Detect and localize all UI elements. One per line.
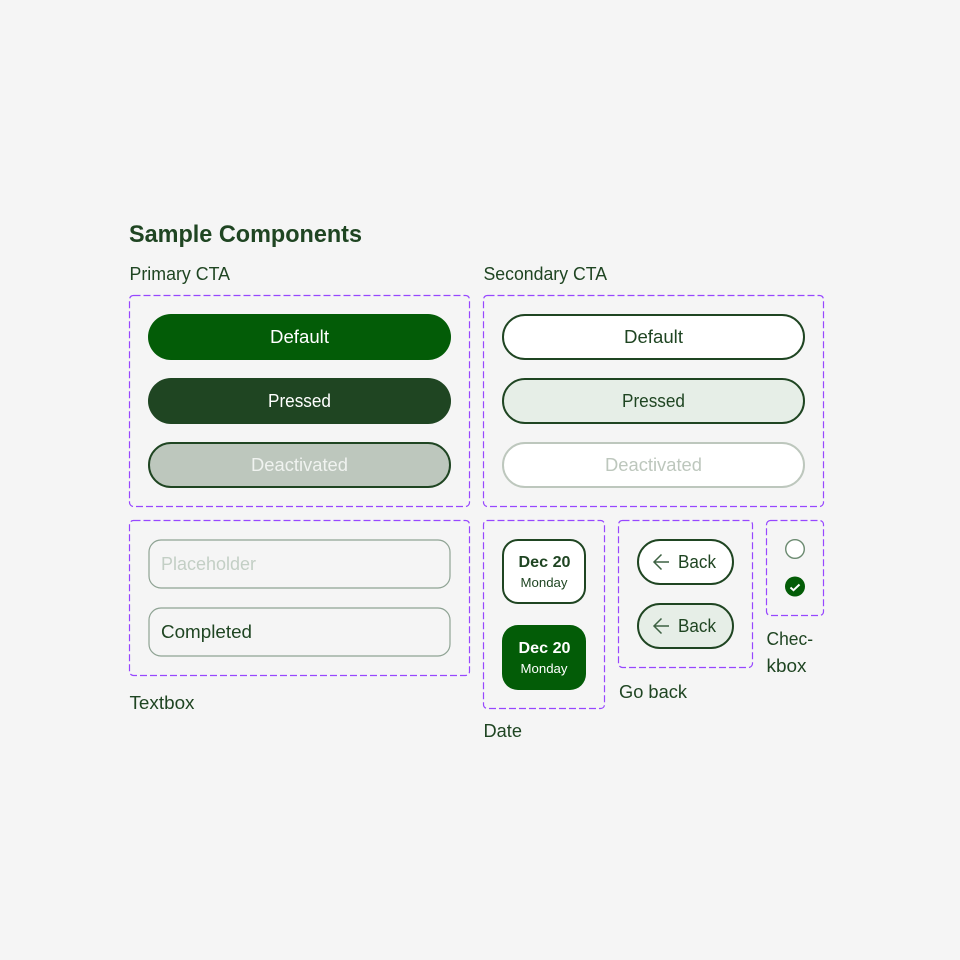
button: primary deactivated bbox=[149, 443, 450, 487]
date card: default: Dec 20 bbox=[518, 554, 571, 571]
button: back pressed: Back bbox=[678, 616, 717, 636]
label: textbox: Textbox bbox=[130, 693, 194, 713]
button: back pressed bbox=[638, 604, 733, 648]
button: back default: Back bbox=[678, 552, 717, 572]
label: checkbox: kbox bbox=[766, 656, 806, 676]
label: checkbox: Chec- bbox=[766, 629, 813, 649]
icon: left arrow bbox=[654, 554, 669, 570]
label: checkbox bbox=[766, 629, 813, 676]
date card: selected: Dec 20 bbox=[518, 640, 571, 657]
panel: go back bbox=[618, 520, 752, 668]
date card: selected: Monday bbox=[520, 661, 568, 676]
title: Sample Components bbox=[129, 221, 362, 248]
icon: left arrow pressed bbox=[654, 618, 669, 634]
panel: date bbox=[484, 520, 604, 708]
button: secondary default: Default bbox=[624, 327, 683, 347]
panel: textbox bbox=[130, 520, 470, 676]
panel: primary CTA bbox=[130, 296, 470, 506]
button: primary pressed bbox=[148, 378, 451, 424]
button: primary default: Default bbox=[270, 327, 329, 347]
date card: selected bbox=[502, 625, 586, 690]
textbox: placeholder: Placeholder bbox=[161, 554, 256, 574]
label: go back: Go back bbox=[619, 682, 688, 702]
label: date: Date bbox=[484, 721, 522, 741]
date card: default bbox=[503, 540, 585, 603]
button: primary deactivated: Deactivated bbox=[251, 455, 348, 475]
button: primary pressed: Pressed bbox=[268, 391, 331, 411]
button: primary default bbox=[148, 314, 451, 360]
checkbox: checked bbox=[785, 576, 805, 596]
heading: secondary CTA: Secondary CTA bbox=[484, 264, 607, 284]
textbox: completed bbox=[149, 608, 450, 656]
checkbox: unchecked bbox=[786, 540, 804, 558]
button: secondary default bbox=[503, 315, 804, 359]
heading: primary CTA: Primary CTA bbox=[130, 264, 230, 284]
button: secondary deactivated bbox=[503, 443, 804, 487]
button: secondary pressed bbox=[503, 379, 804, 423]
textbox: completed: Completed bbox=[161, 622, 252, 642]
button: secondary pressed: Pressed bbox=[622, 391, 685, 411]
panel: checkbox bbox=[766, 520, 824, 616]
panel: secondary CTA bbox=[484, 296, 824, 506]
button: secondary deactivated: Deactivated bbox=[605, 455, 702, 475]
date card: default: Monday bbox=[520, 575, 568, 590]
button: back default bbox=[638, 540, 733, 584]
textbox: placeholder bbox=[149, 540, 450, 588]
